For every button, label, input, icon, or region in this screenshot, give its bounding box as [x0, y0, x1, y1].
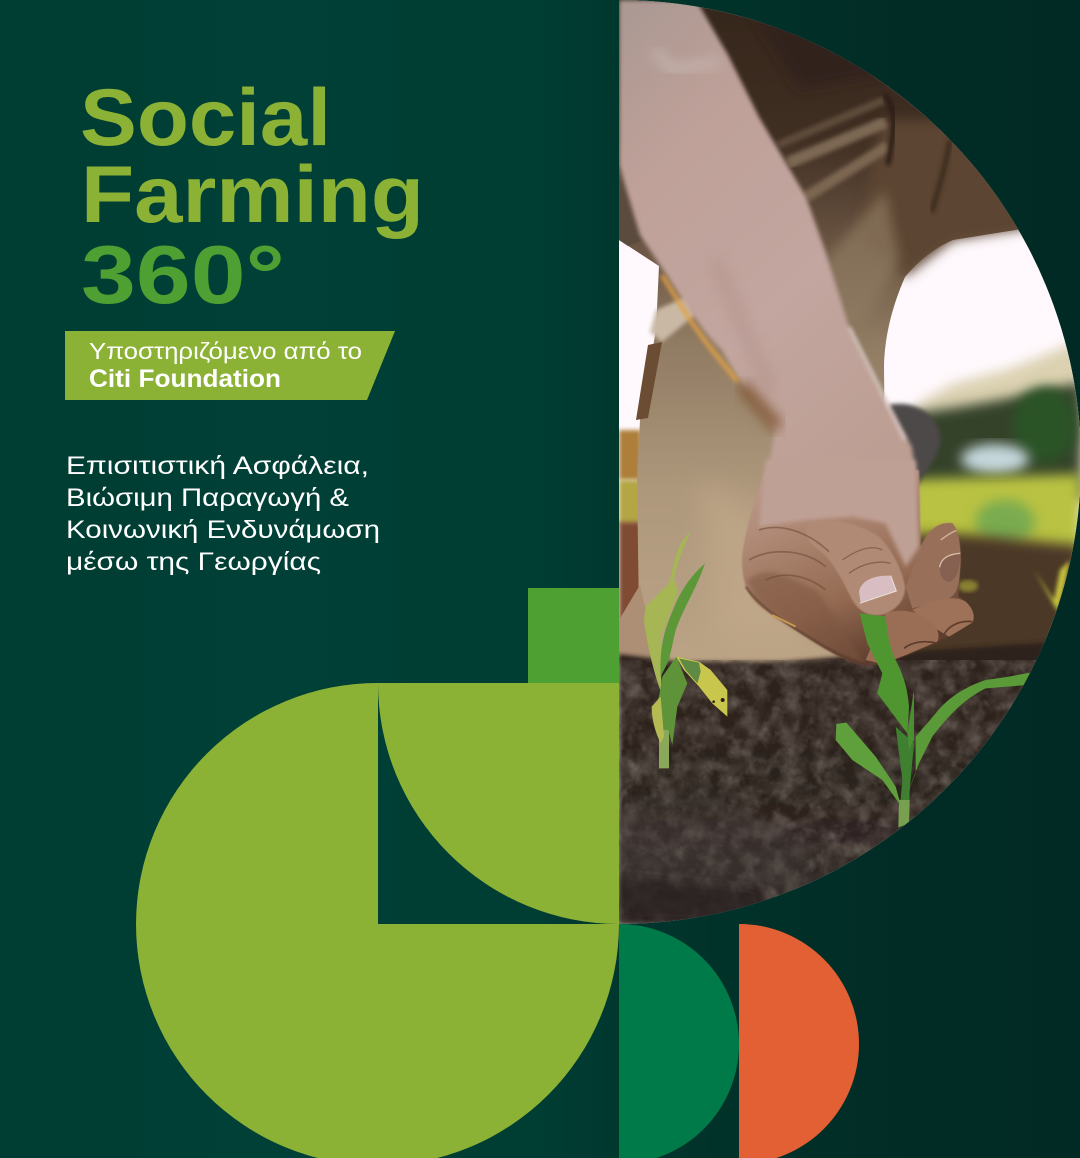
back of hand: [759, 460, 919, 567]
banner: supported by Citi Foundation: Υποστηριζόμενο από το: [89, 338, 362, 364]
shape: large light-green geometric form: [136, 683, 619, 1158]
thumb: [806, 521, 905, 615]
subtitle text block: Επισιτιστική Ασφάλεια,: [66, 452, 369, 480]
subtitle text block: [66, 452, 380, 576]
middle finger: [866, 611, 939, 664]
title: 360°: [81, 228, 285, 321]
subtitle text block: Βιώσιμη Παραγωγή &: [66, 484, 349, 512]
boot behind the hand: [888, 404, 940, 490]
banner: supported by Citi Foundation: Citi Foundation: [89, 365, 281, 393]
banner: supported by Citi Foundation: [65, 331, 395, 400]
hand: [742, 460, 974, 665]
photo: farmer's hand touching a young corn plant: [619, 0, 1080, 924]
subtitle text block: Κοινωνική Ενδυνάμωση: [66, 516, 380, 544]
forearm: [619, 0, 919, 560]
ring finger: [906, 523, 961, 608]
forearm highlights: [655, 50, 905, 440]
subtitle text block: μέσω της Γεωργίας: [66, 548, 321, 576]
shirt and trousers: [619, 0, 1040, 680]
seedling right: [836, 613, 1030, 827]
soil: [619, 640, 1080, 924]
shape: green half circle: [619, 924, 739, 1158]
seedling left: [644, 532, 727, 768]
shape: dark green square: [528, 588, 619, 683]
palm shadow: [747, 572, 866, 663]
hand creases: [749, 528, 829, 590]
title: Farming: [81, 150, 424, 240]
title: [80, 73, 424, 321]
shape: orange half circle: [739, 924, 859, 1158]
title: Social: [80, 73, 331, 163]
photo background: tree line and field: [619, 340, 1080, 700]
little finger: [912, 598, 974, 637]
